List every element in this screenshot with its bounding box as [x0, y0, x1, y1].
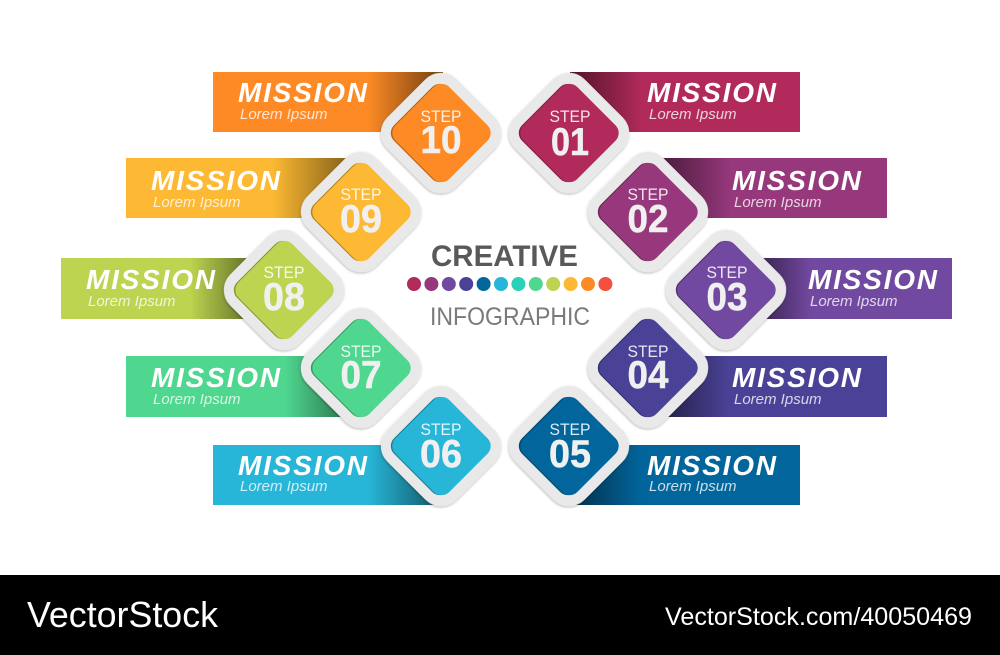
diamond 04: [579, 299, 717, 437]
mission 10: MISSION: [238, 77, 368, 108]
banner 09: [126, 158, 361, 218]
mission 10: Lorem Ipsum: [240, 106, 328, 123]
label 08: STEP: [264, 263, 304, 282]
mission 03: [808, 264, 938, 310]
mission 09: [151, 165, 281, 211]
label 02: STEP: [628, 185, 668, 204]
step 03: [657, 221, 952, 359]
diamond 10: [372, 64, 510, 202]
step 05: [500, 377, 800, 515]
center title: creative: CREATIVE: [431, 240, 578, 273]
diamond 06: [372, 377, 510, 515]
label 09: 09: [340, 198, 382, 241]
label 09: STEP: [340, 185, 382, 204]
label 07: STEP: [340, 342, 382, 361]
step 09: [126, 143, 430, 281]
step 02: [579, 143, 887, 281]
diamond 03: [657, 221, 795, 359]
diamond 09: [292, 143, 430, 281]
mission 03: Lorem Ipsum: [810, 293, 898, 310]
mission 09: Lorem Ipsum: [153, 194, 241, 211]
banner 06: [213, 445, 443, 505]
mission 05: Lorem Ipsum: [649, 478, 737, 495]
label 06: 06: [420, 433, 462, 476]
mission 06: Lorem Ipsum: [240, 478, 328, 495]
label 01: STEP: [550, 107, 590, 126]
mission 07: MISSION: [151, 362, 281, 393]
banner 10: [213, 72, 443, 132]
label 10: STEP: [420, 107, 462, 126]
mission 10: [238, 77, 368, 123]
banner 07: [126, 356, 361, 417]
mission 02: Lorem Ipsum: [734, 194, 822, 211]
label 01: 01: [551, 121, 589, 164]
mission 05: MISSION: [647, 450, 777, 481]
mission 04: [732, 362, 862, 408]
label 04: STEP: [628, 342, 668, 361]
step 08: [61, 221, 353, 359]
mission 03: MISSION: [808, 264, 938, 295]
mission 07: [151, 362, 281, 408]
footer url: VectorStock.com/40050469: [665, 603, 972, 631]
label 06: STEP: [420, 420, 462, 439]
footer logo: VectorStock: [27, 594, 219, 635]
mission 06: MISSION: [238, 450, 368, 481]
diamond 01: [500, 64, 638, 202]
step 01: [500, 64, 800, 202]
step 04: [579, 299, 887, 437]
label 10: 10: [420, 119, 462, 162]
mission 08: [86, 264, 216, 310]
label 01: [550, 107, 590, 164]
colored dots row: [407, 277, 612, 291]
banner 05: [570, 445, 800, 505]
mission 08: MISSION: [86, 264, 216, 295]
banner 03: [755, 258, 952, 319]
mission 01: MISSION: [647, 77, 777, 108]
mission 01: [647, 77, 777, 123]
mission 04: Lorem Ipsum: [734, 391, 822, 408]
center subtitle: infographic: INFOGRAPHIC: [430, 303, 590, 331]
step 10: [213, 64, 510, 202]
mission 02: MISSION: [732, 165, 862, 196]
diamond 07: [292, 299, 430, 437]
banner 04: [660, 356, 887, 417]
footer bar: [0, 575, 1000, 655]
label 03: 03: [706, 276, 748, 319]
label 02: 02: [628, 198, 668, 241]
label 05: 05: [549, 433, 591, 476]
step 06: [213, 377, 510, 515]
diamond 02: [579, 143, 717, 281]
banner 02: [655, 158, 887, 218]
diamond 08: [215, 221, 353, 359]
mission 09: MISSION: [151, 165, 281, 196]
mission 02: [732, 165, 862, 211]
mission 05: [647, 450, 777, 495]
label 07: 07: [340, 354, 382, 397]
mission 07: Lorem Ipsum: [153, 391, 241, 408]
label 03: STEP: [706, 263, 748, 282]
mission 06: [238, 450, 368, 495]
mission 08: Lorem Ipsum: [88, 293, 176, 310]
step 07: [126, 299, 430, 437]
mission 04: MISSION: [732, 362, 862, 393]
banner 01: [570, 72, 800, 132]
label 04: 04: [628, 354, 669, 397]
label 08: 08: [263, 276, 305, 319]
mission 01: Lorem Ipsum: [649, 106, 737, 123]
diamond 05: [500, 377, 638, 515]
label 05: STEP: [550, 420, 590, 439]
banner 08: [61, 258, 261, 319]
